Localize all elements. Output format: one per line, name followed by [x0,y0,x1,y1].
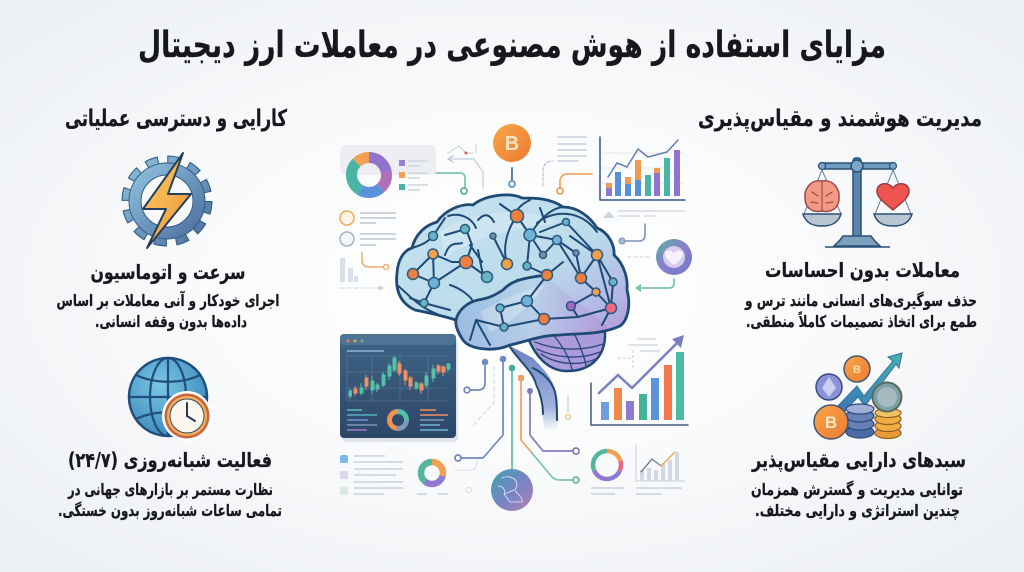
icon: gear and lightning [126,153,208,248]
icon: coins and rising arrow: B [853,364,861,376]
icon: globe and clock [129,358,212,441]
text: 24/7 description: نظارت مستمر بر بازارهای جهانی در [67,480,273,499]
chart: top left donut with legend [340,145,436,192]
icon: coins and rising arrow [814,353,902,439]
panel: scalable portfolios [751,353,966,521]
circuit lines around the top of the brain [436,137,592,194]
panel: central brain and data graphics [340,124,692,511]
icon: bitcoin coin: B [505,133,519,155]
graphic: right side warning row and heart circle [603,211,692,292]
brain main body [397,195,629,349]
brain outline [397,195,629,349]
graphic: bottom left list and donut [340,455,448,495]
chart: bottom right rising bars [591,335,688,425]
brain cerebellum [528,330,605,371]
panel: trading without emotion [744,158,977,331]
circuit lines below the brain [455,356,579,492]
text: speed description [56,290,280,331]
brain stem [510,346,558,432]
brain temporal lobe [456,275,610,349]
icon: balance scale [803,158,912,247]
heading: trading without emotion: معاملات بدون احساسات [765,258,960,282]
heading: speed and automation: سرعت و اتوماسیون [90,260,246,284]
panel: speed and automation [56,153,280,331]
chart: top right bar and line [600,137,685,200]
brain folds and network edges [397,200,613,345]
panel: 24/7 activity [58,358,282,520]
icon: bottom network orb [491,469,533,511]
panel: candlestick trading window [340,334,458,442]
mini donut in window [390,412,406,428]
text: emotion description [744,291,977,331]
heading: 24/7 activity: فعالیت شبانه‌روزی (۲۴/۷) [68,448,272,472]
text: 24/7 description: تمامی ساعات شبانه‌روز بدون خستگی. [58,501,282,520]
graphic: left side info lines and mini bars [340,211,396,291]
candlesticks [349,356,450,399]
icon: coins and rising arrow: B [825,413,837,432]
left section heading: کارایی و دسترسی عملیاتی [65,106,287,132]
brain network nodes [408,210,617,331]
graphic: bottom right donut and small chart [591,445,685,494]
heading: scalable portfolios: سبدهای دارایی مقیاس‌پذیر [751,448,966,473]
text: portfolio description: چندین استراتژی و دارایی مختلف. [755,501,960,521]
text: speed description: اجرای خودکار و آنی معاملات بر اساس [56,290,280,310]
text: speed description: داده‌ها بدون وقفه انسانی. [95,312,247,331]
text: 24/7 description [58,480,282,520]
text: portfolio description [751,480,963,521]
icon: bitcoin coin [493,124,531,162]
text: portfolio description: توانایی مدیریت و گسترش همزمان [751,480,963,499]
brain highlights [440,212,560,258]
